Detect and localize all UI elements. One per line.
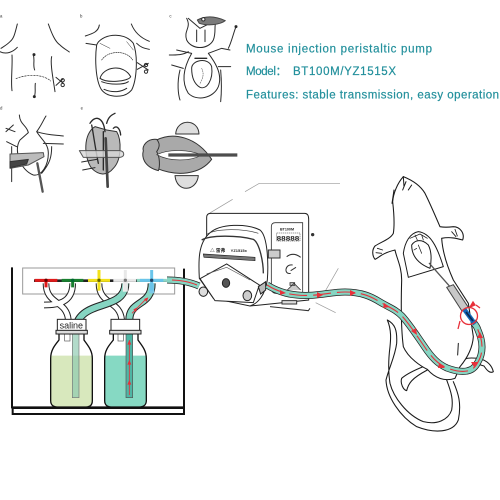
diagram e: cannulated heart xyxy=(79,105,124,187)
bottle: saline xyxy=(51,319,92,407)
tube from pump to rat xyxy=(267,285,482,371)
water bath tray xyxy=(12,267,184,414)
tube from manifold to pump xyxy=(167,280,199,286)
blue connector xyxy=(464,309,475,324)
rat xyxy=(373,177,493,431)
diagram e: cannulated heart: e xyxy=(81,105,84,110)
chest window xyxy=(403,232,443,277)
main tube to rat xyxy=(167,280,482,371)
diagram c: exposed heart: c xyxy=(169,13,172,18)
rat front paws xyxy=(376,229,457,253)
manifold valves xyxy=(34,270,167,291)
pump faint lines xyxy=(209,183,340,313)
pump head: △ 雷弗 xyxy=(210,247,226,254)
control panel: 88888 xyxy=(277,236,300,243)
features text: Features: stable transmission, easy operation xyxy=(246,90,499,102)
surgical diagrams xyxy=(0,13,237,192)
pump drive housing xyxy=(207,213,309,306)
pump head xyxy=(199,225,280,306)
model text: Model： xyxy=(246,66,287,78)
pump head: YZ1515x xyxy=(231,248,248,253)
model text xyxy=(246,66,396,78)
bottle: medicine xyxy=(105,297,148,407)
bottle tray and manifold xyxy=(12,267,184,414)
rat body xyxy=(373,177,473,380)
flow arrows in bottle xyxy=(129,298,147,395)
diagram a: incision xyxy=(0,13,69,98)
saline label: saline xyxy=(60,321,83,331)
rat tail xyxy=(386,320,460,431)
diagram a: incision: a xyxy=(0,13,3,18)
white tubes xyxy=(44,281,152,357)
rotation marker xyxy=(458,302,480,329)
diagram d: heart with clamp xyxy=(0,105,63,192)
rat fur detail xyxy=(392,177,458,355)
title text: Mouse injection peristaltic pump xyxy=(246,44,432,56)
teal tube saline xyxy=(75,283,125,357)
rat left hind leg xyxy=(401,367,427,391)
control panel xyxy=(271,223,303,304)
diagram b: opened chest xyxy=(80,13,149,96)
tube flow arrowheads xyxy=(280,290,483,368)
heart xyxy=(412,241,431,268)
rat right hind leg xyxy=(460,358,493,372)
model text: BT100M/YZ1515X xyxy=(293,66,396,78)
teal tube medicine xyxy=(129,283,152,320)
catheter xyxy=(429,263,450,287)
diagram d: heart with clamp: d xyxy=(0,105,3,110)
diagram b: opened chest: b xyxy=(80,13,83,18)
manifold panel xyxy=(23,268,175,294)
peristaltic pump xyxy=(199,183,340,313)
diagram c: exposed heart xyxy=(169,13,237,102)
diagram f: heart with catheter xyxy=(143,122,237,188)
syringe barrel xyxy=(447,285,468,311)
control panel: BT100M xyxy=(280,227,294,231)
